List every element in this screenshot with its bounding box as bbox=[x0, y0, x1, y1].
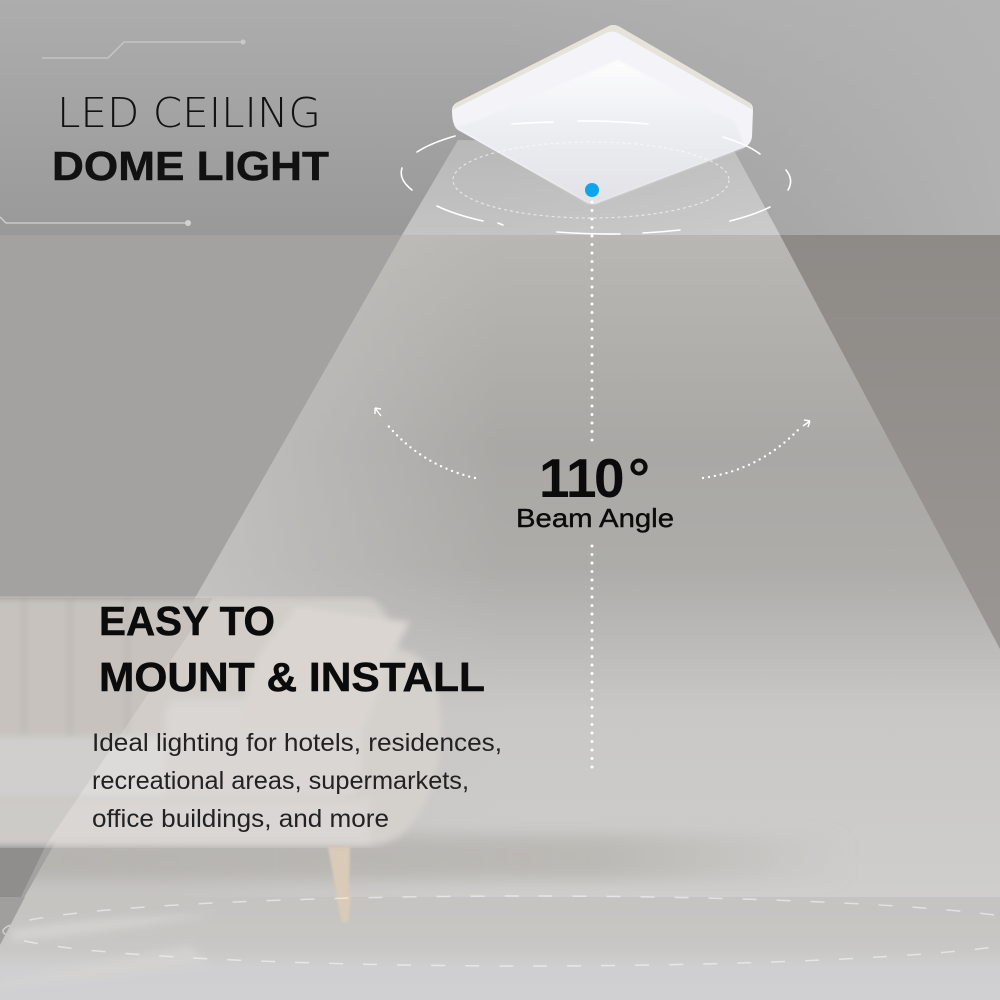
description text: recreational areas, supermarkets, bbox=[92, 767, 469, 795]
sofa left cushion bbox=[0, 737, 165, 797]
title: LED CEILING bbox=[57, 89, 321, 137]
sofa seat cushion bbox=[168, 704, 357, 794]
sofa arm bbox=[330, 650, 441, 846]
top circuit line bbox=[42, 40, 246, 58]
wall: left side outside beam bbox=[0, 235, 500, 900]
heading: easy to mount: MOUNT & INSTALL bbox=[99, 654, 485, 700]
ring: outer arcs bbox=[401, 121, 791, 234]
floor bbox=[0, 897, 1000, 1000]
beam angle value: 110° bbox=[539, 447, 650, 509]
beam angle value: Beam Angle bbox=[516, 503, 674, 533]
sofa back bbox=[0, 596, 386, 802]
ring: inner dashed ellipse bbox=[453, 142, 729, 218]
description text: Ideal lighting for hotels, residences, bbox=[92, 729, 502, 757]
sofa grooves bbox=[24, 598, 127, 735]
shadow under sofa bbox=[0, 835, 850, 880]
heading: easy to mount bbox=[99, 598, 485, 700]
sofa pillow bbox=[382, 618, 410, 646]
title: DOME LIGHT bbox=[52, 143, 329, 189]
heading: easy to mount: EASY TO bbox=[99, 598, 275, 644]
blue dot bbox=[585, 183, 599, 197]
wall: right side outside beam bbox=[500, 235, 1000, 900]
description text: office buildings, and more bbox=[92, 805, 389, 833]
vertical dotted line bbox=[590, 202, 594, 775]
description text bbox=[92, 729, 502, 833]
beam angle value bbox=[516, 447, 674, 533]
wall: illuminated beam area bbox=[0, 235, 1000, 940]
sofa leg lower part bbox=[336, 895, 351, 922]
floor dashed ellipse bbox=[3, 896, 1000, 966]
beam on ceiling bbox=[402, 140, 780, 235]
bottom circuit line bbox=[0, 217, 191, 226]
sofa leg bbox=[328, 847, 350, 922]
title bbox=[52, 89, 329, 189]
left beam arc arrow bbox=[375, 408, 475, 478]
dark wall below sofa left bbox=[0, 845, 46, 940]
sofa bbox=[0, 598, 441, 846]
ceiling band bbox=[0, 0, 1000, 235]
right beam arc arrow bbox=[703, 420, 810, 478]
lamp: ceiling dome light bbox=[452, 25, 753, 204]
sofa left outside-beam shade bbox=[0, 598, 213, 845]
